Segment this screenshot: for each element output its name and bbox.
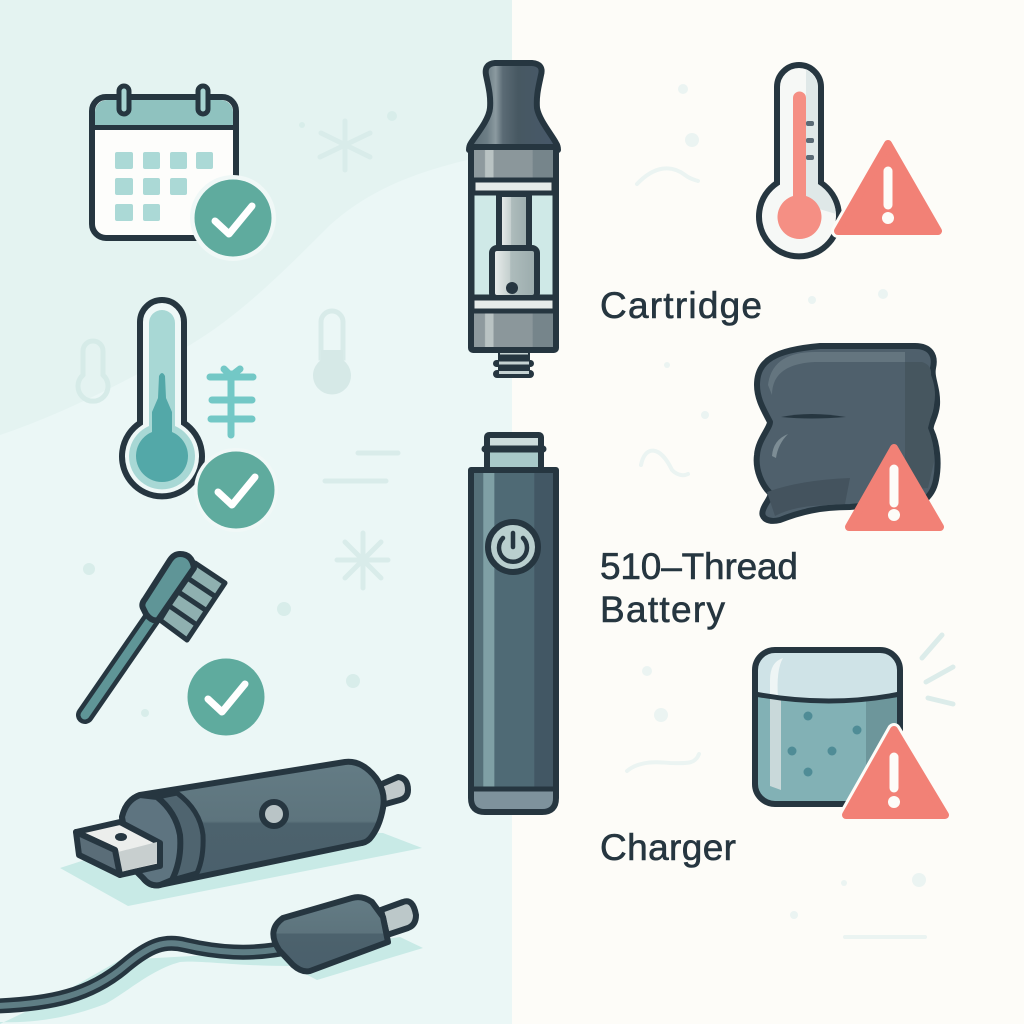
decorative background marks xyxy=(78,111,398,717)
label: 510-Thread Battery xyxy=(600,546,798,630)
charging cable xyxy=(0,897,423,1024)
icon: calendar with check xyxy=(92,86,276,261)
icon: flattened pouch with warning xyxy=(757,346,940,527)
cartridge xyxy=(469,63,558,378)
icon: hot thermometer with warning xyxy=(759,65,938,256)
label: Cartridge: Cartridge xyxy=(600,285,762,326)
label: 510-Thread Battery: Battery xyxy=(600,589,726,630)
icon: cold thermometer with check xyxy=(122,300,278,532)
icon: cloudy jar with warning xyxy=(755,650,945,815)
icon: cleaning brush with check xyxy=(85,554,264,736)
USB charger xyxy=(60,762,422,906)
label: 510-Thread Battery: 510–Thread xyxy=(600,546,798,587)
decorative marks: cream side xyxy=(627,84,953,937)
label: Charger: Charger xyxy=(600,827,736,868)
510-thread battery xyxy=(471,435,556,812)
